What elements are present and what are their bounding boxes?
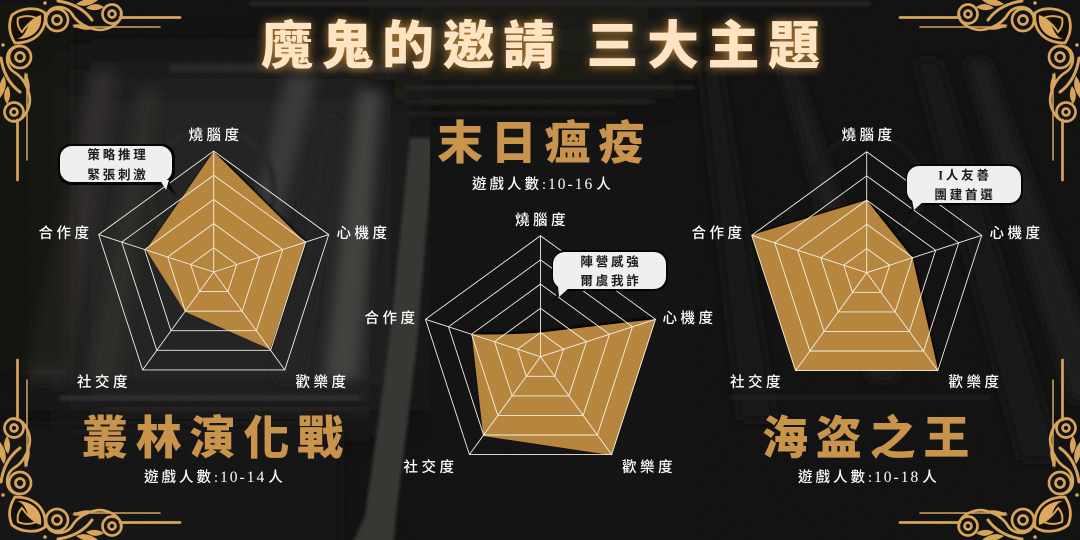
axis labels: 社交度 (730, 373, 784, 391)
main title: 魔鬼的邀請 三大主題 (261, 18, 828, 76)
axis labels: 心機度 (662, 310, 716, 327)
decorative corner: top left (0, 0, 180, 180)
axis labels: 社交度 (404, 458, 458, 476)
axis labels: 合作度 (692, 225, 746, 242)
radar web (426, 236, 656, 455)
callout: 策略推理 (58, 144, 177, 197)
player count: 海盗之王: 遊戲人數:10-18人 (798, 469, 940, 486)
radar data polygon (146, 152, 306, 349)
panel: 海盗之王 radar (692, 126, 1044, 391)
decorative corner: bottom left (0, 360, 180, 540)
callout: 陣營感強: 爾虞我詐 (580, 273, 642, 288)
player count: 叢林演化戰: 遊戲人數:10-14人 (144, 469, 286, 486)
axis labels: 燒腦度 (188, 126, 242, 144)
axis labels: 合作度 (38, 225, 92, 242)
axis labels: 歡樂度 (948, 374, 1002, 391)
callout: 陣營感強 (552, 250, 668, 303)
radar web (752, 152, 982, 371)
decorative corner: bottom right (900, 360, 1080, 540)
axis labels: 燒腦度 (842, 126, 896, 144)
decorative corner: top right (900, 0, 1080, 180)
callout: 陣營感強: 陣營感強 (580, 254, 642, 269)
heading: 末日瘟疫: 末日瘟疫 (437, 117, 652, 169)
axis labels (692, 126, 1044, 391)
radar data polygon (472, 319, 656, 455)
axis labels: 歡樂度 (296, 374, 350, 391)
callout: 策略推理: 策略推理 (87, 147, 149, 162)
callout: 策略推理: 緊張刺激 (87, 167, 149, 182)
panel: 叢林演化戰 radar (38, 126, 390, 391)
axis labels: 心機度 (336, 225, 390, 242)
panel: 末日瘟疫 radar (364, 211, 716, 476)
axis labels (364, 211, 716, 476)
callout: I人友善: 團建首選 (934, 187, 996, 202)
axis labels: 社交度 (77, 373, 131, 391)
heading: 叢林演化戰: 叢林演化戰 (82, 412, 351, 464)
heading: 海盗之王: 海盗之王 (762, 412, 977, 464)
radar web (99, 151, 329, 370)
axis labels: 歡樂度 (622, 459, 676, 476)
axis labels (38, 126, 390, 391)
axis labels: 心機度 (990, 225, 1044, 242)
player count: 末日瘟疫: 遊戲人數:10-16人 (472, 176, 614, 193)
callout: I人友善 (906, 164, 1023, 217)
radar data polygon (752, 200, 938, 371)
axis labels: 合作度 (364, 310, 418, 327)
callout: I人友善: I人友善 (938, 168, 992, 182)
axis labels: 燒腦度 (515, 211, 569, 229)
